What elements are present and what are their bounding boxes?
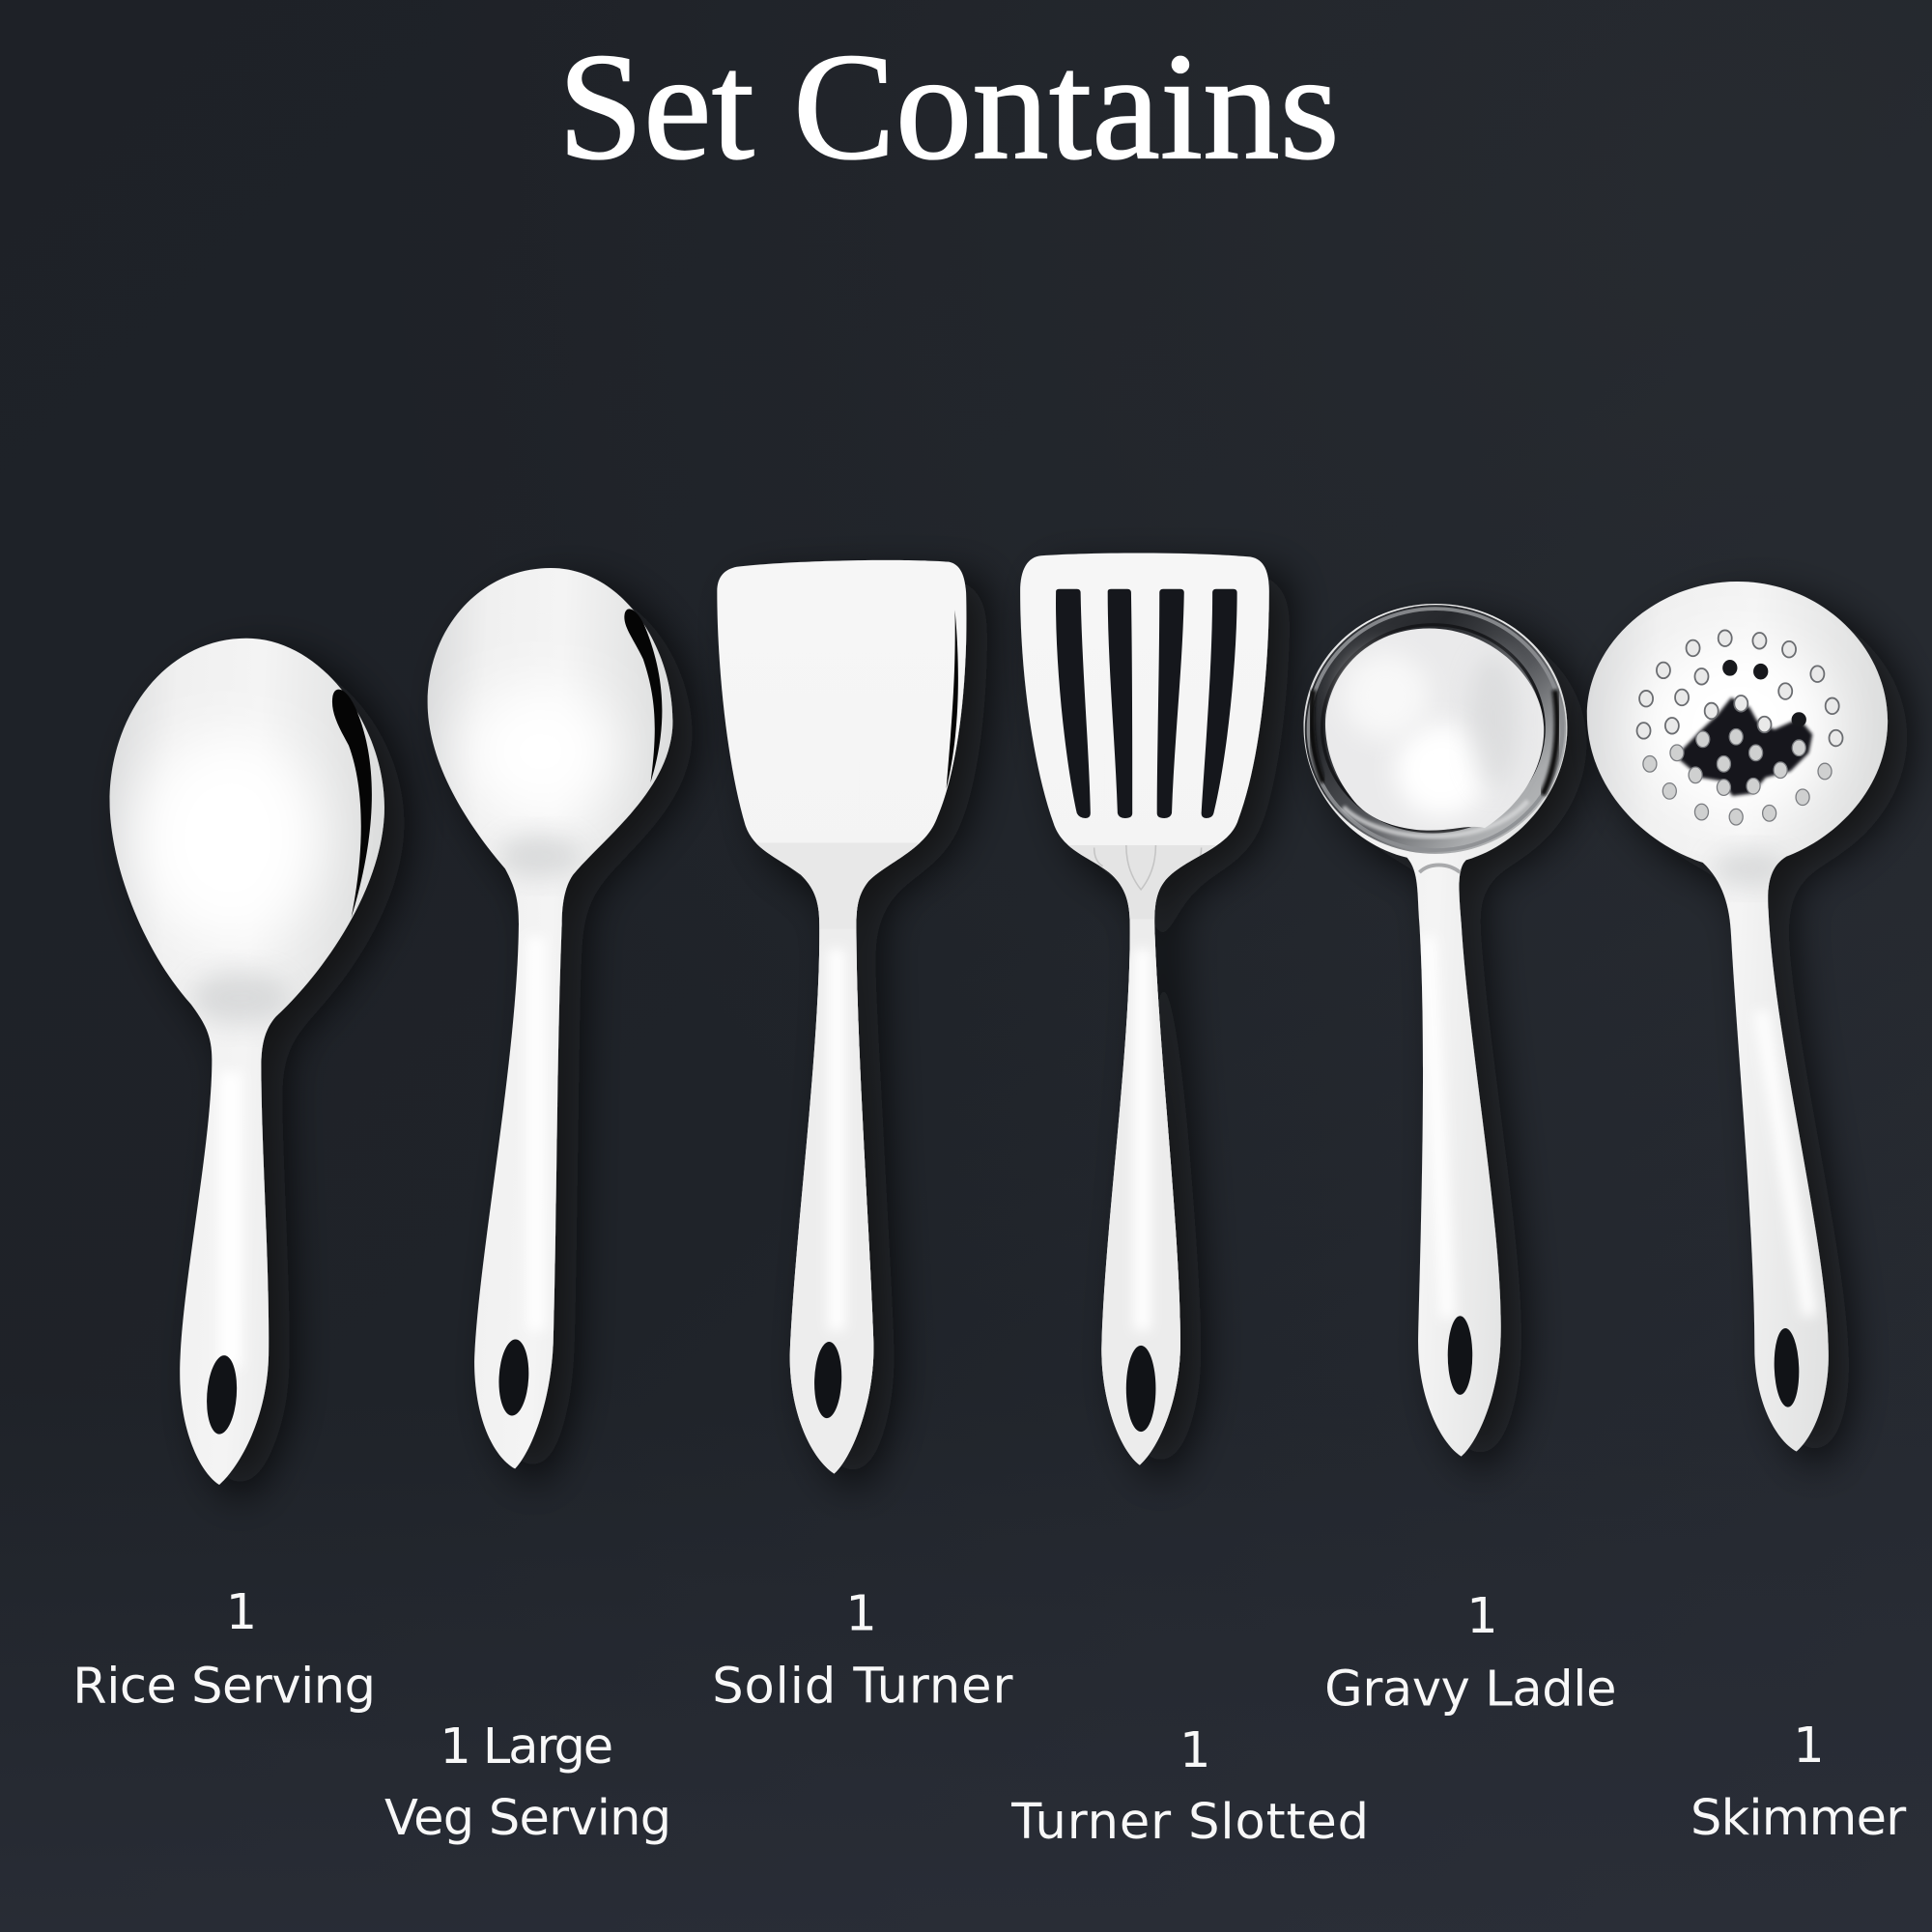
label: gravy ladle bbox=[1324, 1588, 1616, 1718]
label: gravy ladle: Gravy Ladle bbox=[1324, 1661, 1616, 1718]
label: skimmer bbox=[1690, 1718, 1906, 1847]
label: solid turner: Solid Turner bbox=[712, 1659, 1012, 1716]
label: skimmer: 1 bbox=[1793, 1718, 1825, 1775]
icon: rice serving spoon bbox=[110, 639, 384, 1485]
icon: large veg serving spoon bbox=[428, 568, 672, 1468]
label: large veg serving bbox=[384, 1719, 671, 1847]
label: large veg serving: 1 Large bbox=[440, 1719, 613, 1776]
dark reflection bbox=[1676, 697, 1812, 796]
label: turner slotted: Turner Slotted bbox=[1010, 1794, 1369, 1851]
label: turner slotted bbox=[1010, 1722, 1369, 1851]
title: Set Contains bbox=[558, 22, 1339, 191]
slots bbox=[1056, 589, 1237, 818]
icon: slotted turner bbox=[1020, 554, 1269, 1474]
label: rice serving bbox=[72, 1584, 376, 1716]
label: large veg serving: Veg Serving bbox=[384, 1790, 671, 1847]
label: solid turner bbox=[712, 1585, 1012, 1716]
icon: solid turner bbox=[717, 560, 966, 1484]
icon: skimmer bbox=[1587, 582, 1888, 1452]
label: solid turner: 1 bbox=[845, 1585, 877, 1642]
label: gravy ladle: 1 bbox=[1466, 1588, 1498, 1645]
strainer holes bbox=[1637, 630, 1843, 746]
label: rice serving: 1 bbox=[226, 1584, 257, 1641]
label: turner slotted: 1 bbox=[1179, 1722, 1210, 1779]
icon: gravy ladle bbox=[1303, 604, 1567, 1457]
label: rice serving: Rice Serving bbox=[72, 1659, 376, 1716]
label: skimmer: Skimmer bbox=[1690, 1790, 1906, 1847]
